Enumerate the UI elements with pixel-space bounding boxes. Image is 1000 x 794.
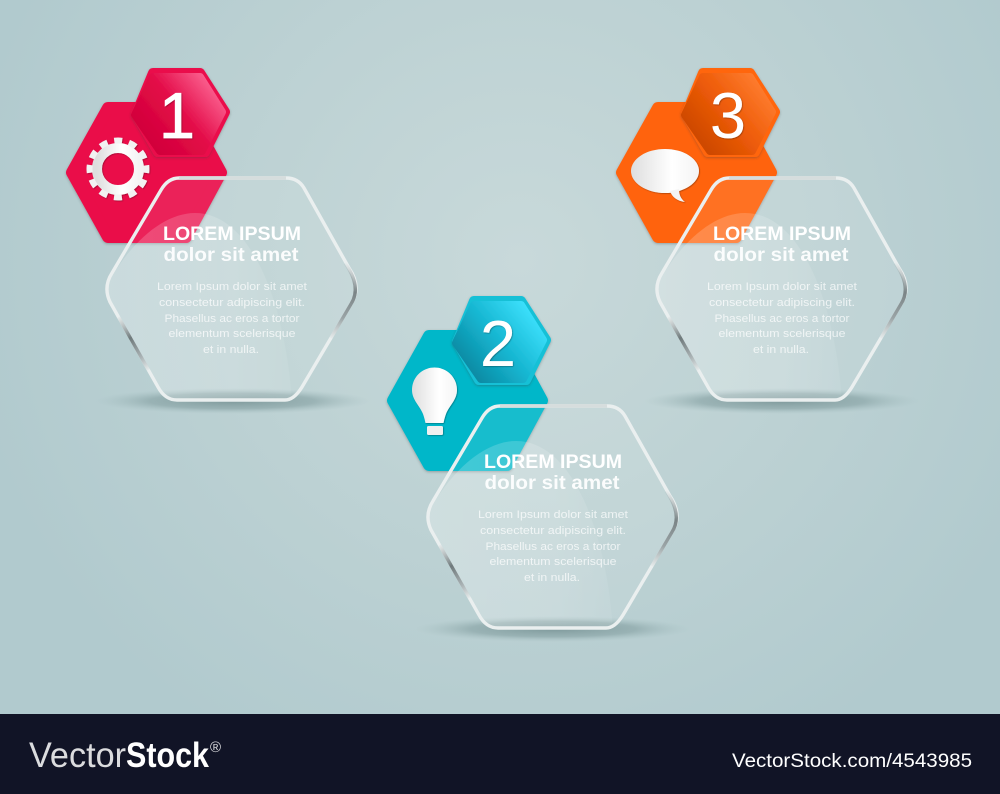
body text: Phasellus ac eros a tortor	[486, 541, 621, 553]
shadow under glass	[415, 616, 691, 642]
body text: consectetur adipiscing elit.	[480, 525, 626, 537]
body text: Lorem Ipsum dolor sit amet	[157, 281, 308, 293]
hexagon: orange base	[622, 108, 771, 237]
heading	[713, 223, 851, 266]
body text: elementum scelerisque	[168, 328, 296, 340]
body text: elementum scelerisque	[490, 556, 616, 568]
panel: step 1	[72, 73, 370, 414]
heading: LOREM IPSUM	[484, 451, 622, 473]
badge hexagon: number 3	[685, 73, 775, 152]
heading: LOREM IPSUM	[713, 223, 851, 245]
panel: step 2	[393, 301, 691, 642]
body text: Lorem Ipsum dolor sit amet	[478, 509, 629, 521]
heading: LOREM IPSUM	[163, 223, 301, 245]
heading	[484, 451, 622, 494]
body text: et in nulla.	[753, 344, 809, 356]
number 3: 3	[710, 79, 746, 152]
logo: VectorStock	[29, 736, 221, 775]
body text: et in nulla.	[524, 572, 580, 584]
body text: Phasellus ac eros a tortor	[164, 313, 300, 325]
panel: step 3	[622, 73, 920, 414]
body text: et in nulla.	[203, 344, 259, 356]
shadow under glass	[644, 388, 920, 414]
logo: VectorStock: Stock	[126, 736, 209, 775]
heading	[163, 223, 301, 266]
hexagon: blue base	[393, 336, 542, 465]
body text	[157, 281, 308, 356]
heading: dolor sit amet	[714, 244, 849, 266]
glass hexagon	[645, 178, 906, 402]
glass hexagon	[95, 178, 356, 402]
image id: VectorStock.com/4543985	[732, 750, 972, 772]
body text	[707, 281, 858, 356]
icon: speech bubble	[631, 149, 699, 202]
body text: elementum scelerisque	[718, 328, 846, 340]
body text	[478, 509, 629, 584]
heading: dolor sit amet	[484, 472, 620, 494]
number 1: 1	[159, 79, 195, 152]
heading: dolor sit amet	[164, 244, 299, 266]
icon: light bulb	[412, 368, 457, 435]
glass hexagon	[416, 406, 677, 630]
icon: gear	[90, 140, 146, 198]
number 2: 2	[480, 307, 516, 380]
body text: consectetur adipiscing elit.	[159, 297, 305, 309]
hexagon: red base	[72, 108, 221, 237]
shadow under glass	[94, 388, 370, 414]
badge hexagon: number 2	[456, 301, 546, 380]
body text: Lorem Ipsum dolor sit amet	[707, 281, 858, 293]
logo: VectorStock: Vector	[29, 736, 126, 775]
footer bar	[0, 714, 1000, 794]
body text: Phasellus ac eros a tortor	[714, 313, 850, 325]
logo: VectorStock: ®	[210, 739, 221, 756]
badge hexagon: number 1	[135, 73, 225, 152]
body text: consectetur adipiscing elit.	[709, 297, 855, 309]
